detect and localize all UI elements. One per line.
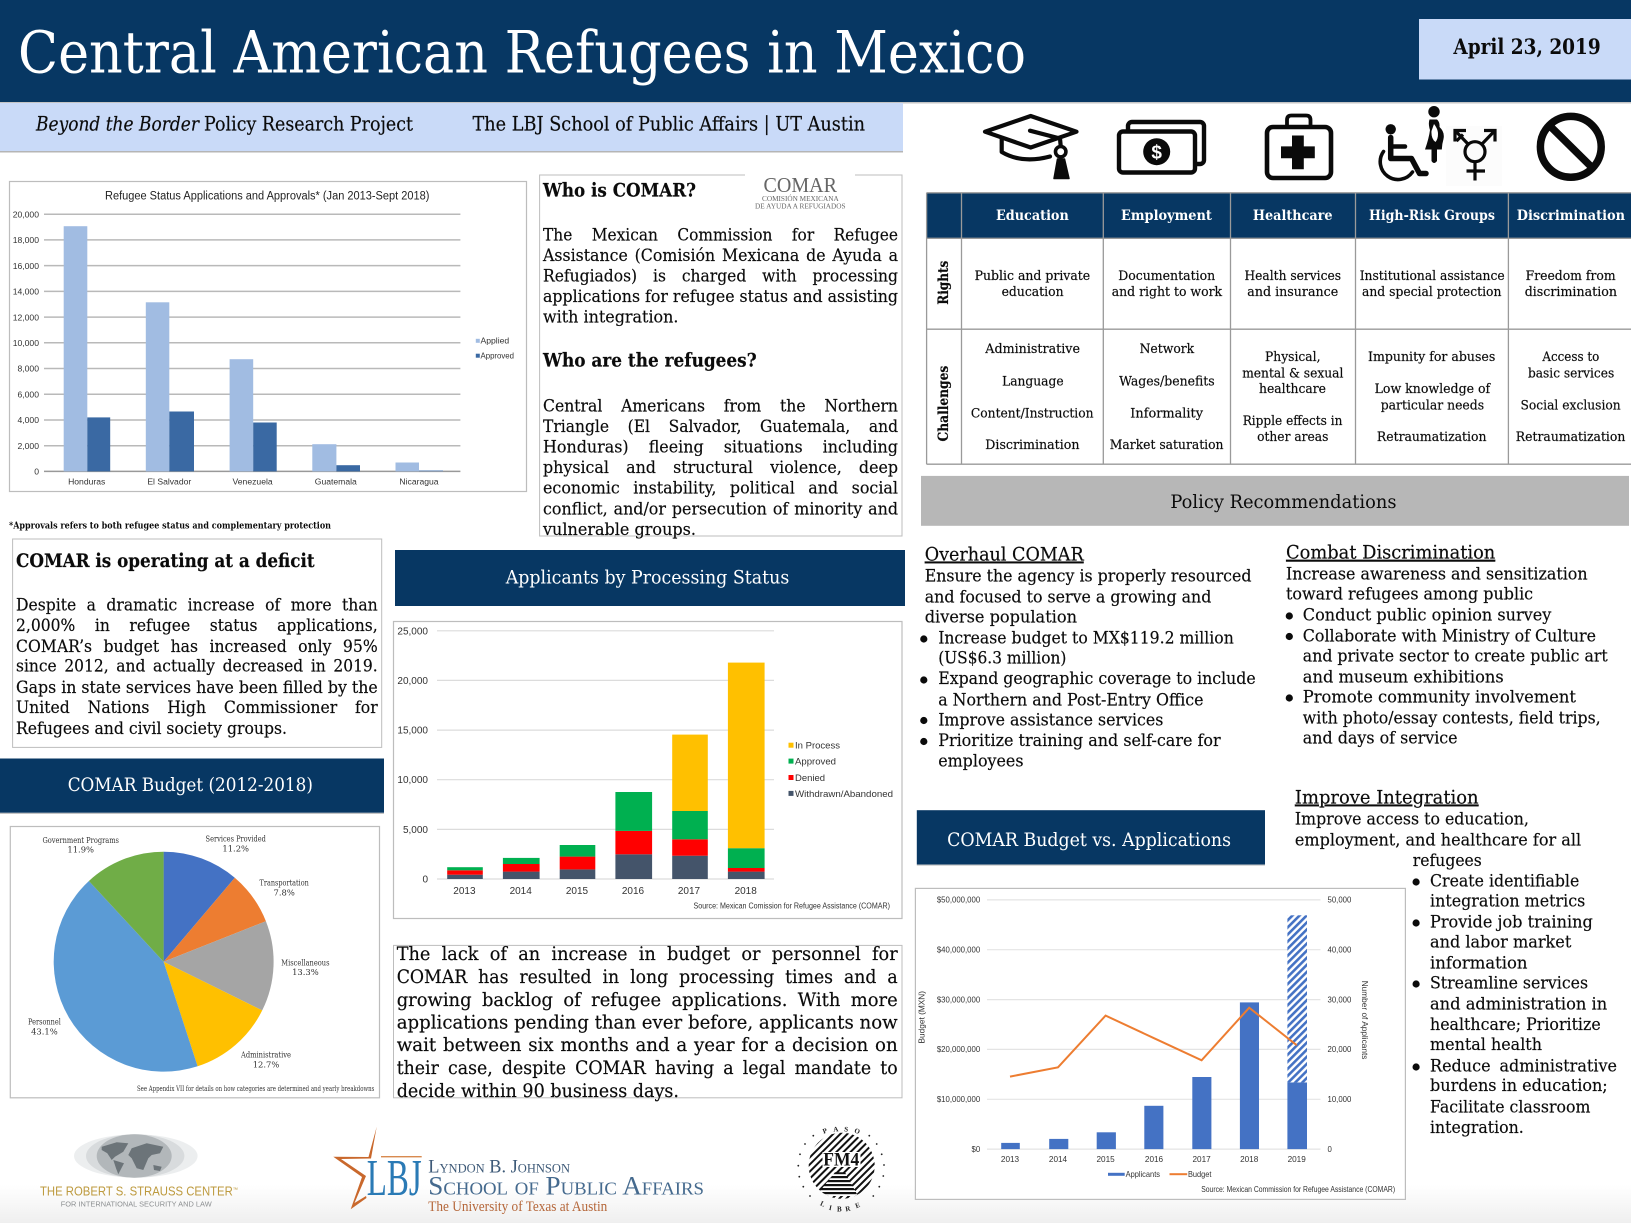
text block: improve integration: refugees [1413, 851, 1482, 871]
chart: applicants by processing status: 0 [422, 874, 428, 886]
chart: COMAR budget vs applications: 40,000 [1328, 946, 1352, 954]
rights cells: discrimination [1525, 285, 1617, 300]
date box [1419, 19, 1631, 80]
chart: COMAR budget pie: Administrative [240, 1050, 291, 1060]
text block: improve integration: integration metrics [1430, 891, 1585, 911]
title: Central American Refugees in Mexico [18, 18, 1026, 86]
chart: refugee status applications and approvals: Guatemala [315, 476, 357, 486]
panel: who is COMAR and who are the refugees: Refugiados) is charged with processing [543, 266, 898, 286]
chart: refugee status applications and approvals: 16,000 [13, 261, 39, 271]
chart: COMAR budget vs applications: 2013 [1001, 1155, 1020, 1164]
challenges cells: Low knowledge of [1375, 382, 1491, 397]
logo: FM4 Paso Libre: B [837, 1206, 842, 1214]
chart: COMAR budget vs applications: 2018 [1240, 1155, 1259, 1164]
panel: who is COMAR and who are the refugees: conflict, and/or persecution of minority and [543, 500, 898, 520]
challenges cells: Network [1140, 342, 1194, 357]
table header row: Education [996, 208, 1069, 224]
legend: Denied [795, 773, 825, 783]
text block: improve integration: Streamline services [1430, 974, 1588, 994]
challenges cells: Administrative [984, 342, 1080, 357]
challenges cells: Ripple effects in [1243, 414, 1342, 429]
text block: lack of budget increase [394, 943, 902, 1102]
text block: combat discrimination: Conduct public opinion survey [1303, 606, 1552, 626]
chart: COMAR budget pie: 12.7% [253, 1059, 279, 1069]
table header row: Discrimination [1517, 208, 1625, 224]
challenges cells: healthcare [1259, 382, 1326, 397]
logo: Strauss Center: THE ROBERT S. STRAUSS CENTER [40, 1184, 261, 1199]
chart: refugee status applications and approvals: 4,000 [17, 415, 39, 425]
logo: LBJ School [333, 1127, 704, 1215]
chart: applicants by processing status: 2018 [735, 886, 757, 897]
text block: improve integration: Provide job training [1430, 913, 1593, 933]
header band [0, 0, 1631, 104]
logo: FM4 Paso Libre: FM4 [823, 1150, 860, 1171]
text block: improve integration: Facilitate classroom [1430, 1097, 1590, 1117]
text block: overhaul COMAR: Overhaul COMAR [925, 544, 1084, 566]
COMAR logo: DE AYUDA A REFUGIADOS [755, 201, 846, 210]
panel: who is COMAR and who are the refugees: Who is COMAR? [542, 180, 696, 202]
row labels: Challenges [936, 365, 952, 442]
text block: lack of budget increase: decide within 90 business days. [397, 1080, 679, 1102]
text block: improve integration: burdens in education; [1430, 1076, 1608, 1096]
rights cells: and right to work [1112, 285, 1222, 300]
panel: who is COMAR and who are the refugees: The Mexican Commission for Refugee [543, 226, 898, 246]
legend [788, 741, 893, 799]
text block: overhaul COMAR: diverse population [925, 607, 1077, 627]
text block: improve integration: Create identifiable [1430, 872, 1579, 892]
chart: COMAR budget pie: Miscellaneous [281, 957, 330, 967]
COMAR logo [745, 172, 855, 212]
logo: FM4 Paso Libre: L [819, 1200, 827, 1209]
legend [476, 336, 514, 361]
panel: who is COMAR and who are the refugees: Assistance (Comisión Mexicana de Ayuda a [542, 246, 898, 266]
challenges cells: Content/Instruction [971, 406, 1094, 421]
chart: applicants by processing status: 10,000 [397, 775, 428, 786]
chart: COMAR budget pie: 13.3% [292, 967, 319, 977]
icon: prohibition sign [1540, 116, 1601, 177]
challenges cells: Social exclusion [1520, 398, 1621, 413]
chart: refugee status applications and approvals: Nicaragua [399, 476, 439, 486]
logo: Strauss Center [40, 1134, 238, 1208]
chart: COMAR budget vs applications: 30,000 [1328, 995, 1352, 1004]
footnote: *Approvals refers to both refugee status and complementary protection [9, 521, 331, 532]
rights cells: Health services [1244, 269, 1341, 284]
panel: COMAR is operating at a deficit: COMAR is operating at a deficit [16, 550, 315, 572]
COMAR logo: COMISIÓN MEXICANA [762, 193, 839, 203]
text block: overhaul COMAR: a Northern and Post-Entry Office [938, 690, 1204, 710]
chart: COMAR budget vs applications: 2017 [1192, 1155, 1211, 1164]
challenges cells: basic services [1528, 366, 1614, 381]
text block: combat discrimination [1286, 542, 1608, 748]
chart: COMAR budget vs applications: $30,000,000 [937, 995, 981, 1004]
chart: COMAR budget vs applications: $50,000,000 [937, 896, 981, 905]
chart: refugee status applications and approvals: 10,000 [13, 338, 39, 348]
challenges cells: Access to [1541, 350, 1600, 365]
text block: overhaul COMAR: employees [938, 751, 1024, 771]
logo: FM4 Paso Libre [797, 1125, 885, 1214]
subheader band: Beyond the Border [35, 112, 200, 136]
chart: COMAR budget pie: 11.2% [222, 844, 249, 854]
panel: who is COMAR and who are the refugees: Who are the refugees? [542, 350, 757, 372]
chart: COMAR budget pie: 7.8% [274, 887, 295, 897]
challenges cells: other areas [1257, 430, 1328, 445]
chart: COMAR budget vs applications [915, 888, 1405, 1199]
heading band: applicants by processing status [395, 550, 905, 606]
chart: COMAR budget vs applications: 2014 [1049, 1155, 1068, 1164]
text block: overhaul COMAR [920, 544, 1256, 771]
chart: applicants by processing status: 2017 [678, 886, 701, 897]
chart: refugee status applications and approvals [10, 182, 526, 492]
chart: COMAR budget vs applications: 10,000 [1328, 1095, 1352, 1104]
panel: who is COMAR and who are the refugees: Triangle (El Salvador, Guatemala, and [543, 417, 898, 437]
table: rights and challenges [927, 193, 1631, 464]
text block: improve integration: mental health [1430, 1035, 1542, 1055]
logo: FM4 Paso Libre: A [833, 1125, 839, 1134]
chart: COMAR budget vs applications: Source: Mexican Commission for Refugee Assistance (COMAR) [1201, 1185, 1395, 1194]
text block: lack of budget increase: wait between six months and a year for a decision on [397, 1034, 898, 1056]
table header row: Healthcare [1253, 208, 1333, 224]
challenges cells: Market saturation [1110, 438, 1224, 453]
challenges cells: Retraumatization [1377, 430, 1486, 445]
text block: overhaul COMAR: Prioritize training and self-care for [938, 731, 1222, 751]
legend: Applied [480, 336, 509, 346]
chart: applicants by processing status: 20,000 [397, 676, 428, 687]
heading band: policy recommendations: Policy Recommendations [1170, 491, 1396, 513]
chart: applicants by processing status: 2014 [510, 886, 532, 897]
chart: refugee status applications and approvals: 0 [34, 467, 39, 477]
logo: LBJ School: LBJ [367, 1150, 422, 1207]
logo: FM4 Paso Libre: S [844, 1125, 849, 1134]
chart: refugee status applications and approvals: 18,000 [13, 235, 39, 245]
rights cells: Documentation [1118, 269, 1215, 284]
rights cells: Freedom from [1526, 269, 1616, 284]
text block: improve integration: healthcare; Prioritize [1430, 1015, 1601, 1035]
chart: COMAR budget vs applications: $0 [972, 1145, 981, 1154]
date box: April 23, 2019 [1453, 35, 1601, 60]
chart: applicants by processing status: Source: Mexican Comission for Refugee Assistance (COMAR) [694, 902, 890, 911]
logo: LBJ School: Lyndon B. Johnson [428, 1156, 571, 1177]
subheader band: The LBJ School of Public Affairs | UT Austin [472, 112, 865, 136]
chart: refugee status applications and approvals: 14,000 [13, 287, 39, 297]
text block: overhaul COMAR: Expand geographic coverage to include [938, 669, 1256, 689]
panel: COMAR is operating at a deficit: COMAR’s budget has increased only 95% [16, 637, 378, 657]
text block: overhaul COMAR: Improve assistance services [938, 710, 1163, 730]
chart: COMAR budget vs applications: 2016 [1145, 1155, 1164, 1164]
COMAR logo: COMAR [764, 173, 837, 197]
text block: improve integration: employment, and healthcare for all [1295, 830, 1581, 850]
chart: applicants by processing status [394, 622, 902, 918]
text block: combat discrimination: and days of service [1303, 728, 1458, 748]
panel: who is COMAR and who are the refugees: physical and structural violence, deep [543, 458, 898, 478]
panel: COMAR is operating at a deficit: Refugees and civil society groups. [16, 719, 287, 739]
chart: refugee status applications and approvals: Venezuela [233, 476, 273, 486]
chart: COMAR budget pie: 43.1% [31, 1027, 58, 1037]
challenges cells: Wages/benefits [1119, 374, 1215, 389]
icon: pregnant person [1425, 106, 1444, 163]
chart: COMAR budget vs applications: 2015 [1096, 1155, 1115, 1164]
chart: refugee status applications and approvals: 20,000 [13, 209, 39, 219]
icon: money: $ [1151, 142, 1162, 164]
logo: FM4 Paso Libre: I [828, 1204, 833, 1212]
rights cells: Institutional assistance [1360, 269, 1505, 284]
challenges cells: particular needs [1381, 398, 1484, 413]
panel: who is COMAR and who are the refugees: economic instability, political and social [543, 478, 898, 498]
chart: applicants by processing status: 15,000 [397, 726, 428, 737]
chart: COMAR budget pie: 11.9% [67, 845, 94, 855]
icon: money [1119, 122, 1204, 172]
text block: lack of budget increase: applications pending than ever before, applicants now [397, 1012, 898, 1034]
row labels: Rights [936, 260, 952, 305]
rights cells: and special protection [1362, 285, 1501, 300]
row labels [936, 260, 952, 442]
challenges cells: Informality [1130, 406, 1204, 421]
chart: COMAR budget vs applications: 0 [1328, 1145, 1332, 1154]
panel: COMAR is operating at a deficit: 2,000% in refugee status applications, [16, 616, 378, 636]
text block: overhaul COMAR: and focused to serve a growing and [925, 587, 1212, 607]
rights cells [975, 269, 1617, 300]
text block: combat discrimination: Increase awareness and sensitization [1286, 564, 1588, 584]
challenges cells: mental & sexual [1242, 366, 1343, 381]
text block: improve integration: Improve Integration [1295, 786, 1479, 808]
logo: Strauss Center: FOR INTERNATIONAL SECURITY AND LAW [61, 1199, 212, 1208]
panel: who is COMAR and who are the refugees: with integration. [543, 308, 678, 328]
heading band: applicants by processing status: Applicants by Processing Status [505, 566, 789, 588]
legend: Applicants [1126, 1170, 1160, 1179]
text block: improve integration: integration. [1430, 1118, 1524, 1138]
chart: COMAR budget vs applications: 20,000 [1328, 1045, 1352, 1054]
panel: COMAR is operating at a deficit: Gaps in state services have been filled by the [16, 678, 378, 698]
text block: improve integration: Improve access to education, [1295, 810, 1529, 830]
text block: improve integration: and labor market [1430, 932, 1571, 952]
chart: COMAR budget vs applications: $40,000,000 [937, 946, 981, 954]
chart: applicants by processing status: 2015 [566, 886, 589, 897]
text block: improve integration: and administration in [1430, 994, 1607, 1014]
logo: LBJ School: The University of Texas at Austin [428, 1199, 608, 1215]
table header row: High-Risk Groups [1369, 208, 1495, 224]
icon: graduation cap [985, 116, 1076, 178]
icon: medical kit [1267, 116, 1331, 178]
text block: combat discrimination: Combat Discrimination [1286, 542, 1495, 564]
text block: lack of budget increase: growing backlog of refugee applications. With more [397, 989, 898, 1011]
heading band: policy recommendations [921, 476, 1629, 526]
chart: COMAR budget pie: See Appendix VII for details on how categories are determined and yearly breakdowns [137, 1084, 374, 1093]
chart: refugee status applications and approvals: 6,000 [17, 389, 39, 399]
chart: COMAR budget vs applications: Number of Applicants [1360, 981, 1369, 1059]
text block: lack of budget increase: their case, despite COMAR having a legal mandate to [397, 1057, 898, 1079]
subheader band: Policy Research Project [204, 112, 413, 136]
chart: COMAR budget vs applications: $10,000,000 [937, 1095, 981, 1104]
panel: who is COMAR and who are the refugees: Central Americans from the Northern [543, 397, 898, 417]
panel: COMAR is operating at a deficit: since 2012, and actually decreased in 2019. [16, 657, 378, 677]
chart: refugee status applications and approvals: 12,000 [13, 312, 39, 322]
logo: FM4 Paso Libre: O [853, 1127, 862, 1136]
heading band: COMAR budget vs applications: COMAR Budget vs. Applications [947, 829, 1231, 851]
text block: overhaul COMAR: Ensure the agency is properly resourced [925, 567, 1252, 587]
logo: FM4 Paso Libre: E [854, 1201, 862, 1210]
challenges cells: Retraumatization [1516, 430, 1625, 445]
text block: combat discrimination: Promote community involvement [1303, 688, 1576, 708]
text block: overhaul COMAR: Increase budget to MX$119.2 million [938, 628, 1234, 648]
table header row: Employment [1121, 208, 1213, 224]
logo: FM4 Paso Libre: R [845, 1204, 852, 1213]
chart: applicants by processing status: 5,000 [403, 825, 428, 836]
logo: Strauss Center: ™ [233, 1187, 238, 1194]
text block: combat discrimination: and museum exhibitions [1303, 667, 1504, 687]
chart: applicants by processing status: 2016 [622, 886, 645, 897]
logo: LBJ School: School of Public Affairs [428, 1171, 704, 1200]
panel: who is COMAR and who are the refugees: Honduras) fleeing situations including [543, 438, 898, 458]
chart: COMAR budget pie: Government Programs [42, 835, 119, 845]
text block: combat discrimination: Collaborate with Ministry of Culture [1303, 626, 1596, 646]
challenges cells: Discrimination [985, 438, 1080, 453]
legend: In Process [795, 741, 840, 751]
text block: lack of budget increase: The lack of an increase in budget or personnel for [397, 943, 899, 965]
panel: who is COMAR and who are the refugees [540, 172, 902, 540]
text block: improve integration: information [1430, 953, 1528, 973]
legend: Withdrawn/Abandoned [795, 789, 893, 799]
text block: improve integration [1295, 786, 1617, 1138]
chart: refugee status applications and approvals: Honduras [68, 476, 105, 486]
challenges cells: Impunity for abuses [1368, 350, 1495, 365]
legend: Approved [795, 756, 836, 766]
rights cells: and insurance [1247, 285, 1338, 300]
challenges cells: Physical, [1265, 350, 1320, 365]
heading band: COMAR budget vs applications [917, 810, 1265, 866]
subheader band [0, 103, 903, 152]
table header row [927, 193, 1631, 238]
challenges cells: Language [1002, 374, 1064, 389]
panel: COMAR is operating at a deficit: United Nations High Commissioner for [16, 698, 378, 718]
rights cells: education [1002, 285, 1064, 300]
chart: COMAR budget vs applications: 2019 [1288, 1155, 1306, 1164]
chart: COMAR budget pie: Services Provided [206, 834, 266, 844]
chart: refugee status applications and approvals: El Salvador [147, 476, 191, 486]
chart: COMAR budget vs applications: $20,000,000 [937, 1045, 981, 1054]
legend: Approved [480, 351, 514, 361]
text block: lack of budget increase: COMAR has resulted in long processing times and a [397, 966, 898, 988]
panel: who is COMAR and who are the refugees: vulnerable groups. [542, 520, 696, 540]
chart: applicants by processing status: 25,000 [397, 626, 428, 637]
text block: combat discrimination: toward refugees among public [1286, 584, 1533, 604]
chart: COMAR budget pie: Personnel [28, 1016, 61, 1026]
heading band: COMAR budget: COMAR Budget (2012-2018) [68, 774, 313, 796]
text block: combat discrimination: with photo/essay contests, field trips, [1303, 708, 1601, 728]
chart: COMAR budget pie [10, 826, 380, 1098]
chart: applicants by processing status: 2013 [453, 886, 476, 897]
chart: refugee status applications and approvals: Refugee Status Applications and Approvals* (Jan 2013-Sept 2018) [105, 191, 430, 203]
legend: Budget [1188, 1170, 1212, 1179]
icon: transgender symbol [1446, 126, 1502, 186]
legend [1108, 1170, 1212, 1179]
chart: refugee status applications and approvals: 8,000 [17, 364, 39, 374]
rights cells: Public and private [975, 269, 1090, 284]
chart: COMAR budget pie: Transportation [260, 878, 309, 888]
chart: COMAR budget vs applications: 50,000 [1328, 896, 1352, 905]
chart: COMAR budget vs applications: Budget (MXN) [918, 991, 926, 1044]
panel: COMAR is operating at a deficit: Despite a dramatic increase of more than [16, 596, 378, 616]
text block: improve integration: Reduce administrative [1430, 1056, 1617, 1076]
panel: who is COMAR and who are the refugees: applications for refugee status and assisting [543, 287, 898, 307]
panel: COMAR is operating at a deficit [13, 539, 382, 747]
heading band: COMAR budget [0, 758, 384, 814]
icon: wheelchair [1380, 124, 1426, 180]
text block: overhaul COMAR: (US$6.3 million) [938, 648, 1066, 668]
challenges cells [971, 342, 1625, 453]
logo: FM4 Paso Libre: P [822, 1126, 829, 1136]
chart: refugee status applications and approvals: 2,000 [17, 441, 39, 451]
text block: combat discrimination: and private sector to create public art [1303, 647, 1608, 667]
